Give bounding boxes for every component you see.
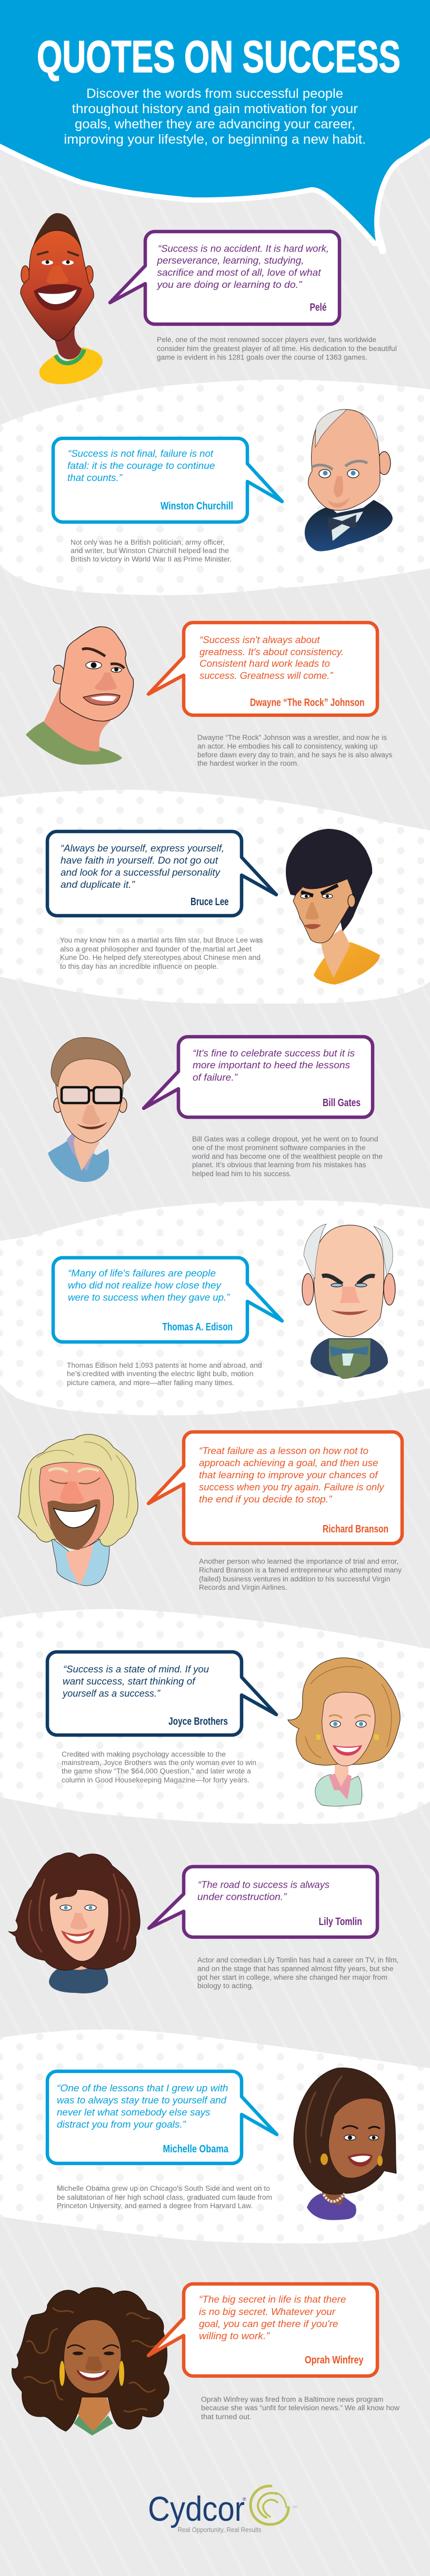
quote: Branson: “Treat failure as a lesson on how not to [199,1445,368,1456]
biography: Lily Tomlin: got her start in college, where she changed her major from [197,1973,387,1981]
quote: The Rock: Consistent hard work leads to [199,658,330,669]
quote: Oprah Winfrey: goal, you can get there if you're [199,2318,338,2329]
biography: Edison [67,1361,262,1387]
biography: Churchill: and writer, but Winston Churchill helped lead the [71,547,229,555]
biography: Bill Gates: planet. It’s obvious that learning from his mistakes has [192,1161,366,1169]
speech bubble: Pelé [110,232,339,324]
biography: Edison: Thomas Edison held 1,093 patents at home and abroad, and [67,1361,262,1369]
biography: Branson: Records and Virgin Airlines. [199,1583,287,1591]
quote: Edison: “Many of life's failures are people [68,1267,216,1279]
speech bubble: Bill Gates [144,1037,373,1117]
biography: Churchill: British to victory in World War II as Prime Minister. [71,555,232,563]
biography: Oprah Winfrey: that turned out. [201,2413,252,2421]
quote: Branson: approach achieving a goal, and then use [199,1457,378,1468]
biography: The Rock: the hardest worker in the room. [197,759,299,767]
speech bubble: Oprah Winfrey [148,2284,377,2376]
biography: Lily Tomlin: biology to acting. [197,1982,254,1990]
biography: Oprah Winfrey: Oprah Winfrey was fired from a Baltimore news program [201,2395,383,2403]
biography: Churchill: Not only was he a British politician, army officer, [71,538,225,546]
band: white dotted section 3 [0,1200,430,1415]
biography: Branson [199,1558,402,1591]
band: white dotted section 4 [0,1609,430,1824]
biography: Bruce Lee: to this day has an incredible influence on people. [60,963,218,970]
biography: Joyce Brothers [62,1750,256,1784]
biography: Pelé [157,336,397,361]
quote: Joyce Brothers: yourself as a success.” [62,1688,161,1699]
speech bubble: Bruce Lee [47,831,276,916]
attribution: Joyce Brothers: Joyce Brothers [168,1716,228,1727]
logo: Cydcor: Cydcor [148,2489,245,2528]
panel: Dwayne Johnson [26,623,393,767]
biography: Lily Tomlin [197,1956,399,1990]
biography: Bill Gates: one of the most prominent software companies in the [192,1144,365,1151]
quote: Pelé: perseverance, learning, studying, [156,255,304,266]
attribution: Oprah Winfrey: Oprah Winfrey [305,2354,364,2366]
biography: The Rock [197,734,393,767]
quote: The Rock: success. Greatness will come.” [199,670,333,681]
quote: Michelle Obama: never let what somebody else says [57,2107,211,2118]
quote: Branson: that learning to improve your chances of [199,1469,378,1480]
quote: Bruce Lee: and look for a successful personality [61,867,221,878]
speech bubble: Churchill [53,438,282,522]
biography: Bruce Lee: Kune Do. He helped defy stereotypes about Chinese men and [60,954,261,961]
speech bubble: Branson [148,1432,402,1543]
biography: Joyce Brothers: Credited with making psychology accessible to the [62,1750,226,1758]
attribution: Churchill: Winston Churchill [161,500,233,512]
biography: Branson: Another person who learned the importance of trial and error, [199,1558,399,1565]
quote: The Rock [199,634,344,681]
quote: Lily Tomlin: “The road to success is always [198,1879,329,1890]
biography: Bill Gates [192,1135,383,1178]
biography: Branson: Richard Branson is a famed entrepreneur who attempted many [199,1566,402,1574]
biography: Michelle Obama: be salutatorian of her high school class, graduated cum laude from [57,2193,272,2201]
biography: The Rock: Dwayne “The Rock” Johnson was a wrestler, and now he is [197,734,387,741]
attribution: Branson: Richard Branson [323,1523,388,1535]
biography: The Rock: before dawn every day to train, and he says he is also always [197,751,393,759]
band: white dotted section 2 [0,790,430,1004]
quote: Lily Tomlin: under construction.” [197,1891,287,1902]
quote: Michelle Obama: “One of the lessons that I grew up with [57,2082,228,2093]
quote: Bruce Lee [61,843,224,890]
attribution: Lily Tomlin: Lily Tomlin [319,1916,362,1928]
biography: Branson: (failed) business ventures in addition to his successful Virgin [199,1575,391,1583]
biography: Pelé: Pelé, one of the most renowned soccer players ever, fans worldwide [157,336,376,344]
quote: The Rock: greatness. It's about consistency. [199,646,344,657]
intro text: goals, whether they are advancing your career, [75,117,355,132]
biography: Churchill [71,538,232,563]
quote: Churchill: that counts.” [67,472,123,483]
quote: Branson: success when you try again. Failure is only [199,1481,385,1492]
logo: Cydcor: Real Opportunity, Real Results [178,2526,261,2533]
speech bubble: Michelle Obama [47,2071,277,2163]
quote: Bruce Lee: and duplicate it.” [61,879,135,890]
speech bubble: The Rock [148,623,377,715]
quote: Pelé: “Success is no accident. It is hard work, [158,243,329,254]
portrait: Michelle Obama [294,2068,396,2220]
quote: Michelle Obama: was to always stay true to yourself and [57,2094,227,2106]
biography: Bill Gates: world and has become one of the wealthiest people on the [192,1152,383,1160]
quote: Edison [68,1267,230,1303]
quote: Joyce Brothers: “Success is a state of mind. If you [63,1663,209,1675]
quote: Edison: who did not realize how close they [68,1280,222,1290]
speech bubble: Edison [53,1258,282,1342]
band: white dotted section 1 [0,379,430,595]
band: white dotted section 5 [0,2029,430,2243]
quote: Bruce Lee: “Always be yourself, express yourself, [61,843,224,854]
quote: Bill Gates: “It's fine to celebrate success but it is [193,1047,355,1059]
quote: Pelé: sacrifice and most of all, love of what [157,267,321,278]
biography: Michelle Obama: Michelle Obama grew up on Chicago’s South Side and went on to [57,2184,270,2192]
portrait: Bill Gates [48,1037,131,1182]
panel: Richard Branson [18,1432,402,1591]
attribution: Edison: Thomas A. Edison [162,1321,233,1333]
biography: Edison: picture camera, and more—after failing many times. [67,1379,234,1387]
biography: Joyce Brothers: the game show “The $64,000 Question,” and later wrote a [62,1767,252,1775]
quote: Pelé: you are doing or learning to do.” [156,279,302,290]
biography: Bruce Lee: also a great philosopher and founder of the martial art Jeet [60,945,252,953]
quote: Bruce Lee: have faith in yourself. Do not go out [61,855,218,866]
attribution: Bruce Lee: Bruce Lee [191,896,228,908]
biography: Bill Gates: Bill Gates was a college dropout, yet he went on to found [192,1135,378,1143]
quote: Lily Tomlin [197,1879,329,1902]
quote: Bill Gates [193,1047,355,1083]
attribution: Pelé: Pelé [309,301,326,314]
biography: Oprah Winfrey [201,2395,399,2421]
biography: Lily Tomlin: Actor and comedian Lily Tomlin has had a career on TV, in film, [197,1956,399,1964]
icon: Cydcor swirl [251,2486,288,2524]
panel: Winston Churchill [53,409,393,563]
attribution: Michelle Obama: Michelle Obama [163,2143,228,2155]
quote: Joyce Brothers [62,1663,209,1699]
biography: Joyce Brothers: mainstream, Joyce Brothers was the only woman ever to win [62,1759,256,1767]
biography: Bruce Lee [60,936,263,970]
attribution: The Rock: Dwayne “The Rock” Johnson [250,697,364,708]
logo: Cydcor [148,2486,297,2533]
quote: The Rock: “Success isn't always about [199,634,320,645]
quote: Churchill [67,448,215,483]
quote: Branson [199,1445,385,1505]
intro text [64,86,366,147]
panel: Oprah Winfrey [12,2284,399,2435]
biography: Oprah Winfrey: because she was “unfit for television news.” We all know how [201,2404,399,2412]
portrait: The Rock [26,627,134,765]
panel: Thomas Edison [53,1224,395,1387]
biography: Lily Tomlin: and on the stage that has spanned almost fifty years, but she [197,1965,394,1972]
quote: Joyce Brothers: want success, start thinking of [63,1676,196,1687]
portrait: Oprah Winfrey [12,2288,169,2435]
portrait: Pelé [21,213,103,384]
portrait: Richard Branson [18,1435,138,1586]
biography: Joyce Brothers: column in Good Housekeeping Magazine—for forty years. [62,1776,249,1784]
quote: Oprah Winfrey: is no big secret. Whatever your [199,2306,336,2317]
panel: Lily Tomlin [8,1853,399,1993]
panel: Pelé [21,213,397,384]
portrait: Edison [302,1224,395,1379]
portrait: Lily Tomlin [8,1853,140,1993]
logo: Cydcor: SM [293,2506,297,2509]
panel: Joyce Brothers [47,1652,400,1806]
biography: Edison: he’s credited with inventing the electric light bulb, motion [67,1370,254,1378]
biography: Michelle Obama: Princeton University, and earned a degree from Harvard Law. [57,2202,253,2210]
quote: Michelle Obama: distract you from your goals.” [57,2119,186,2130]
portrait: Bruce Lee [286,829,380,985]
biography: Bruce Lee: You may know him as a martial arts film star, but Bruce Lee was [60,936,263,944]
quote: Michelle Obama [57,2082,228,2130]
biography: Bill Gates: helped lead him to his success. [192,1170,292,1178]
biography: The Rock: an actor. He embodies his call to consistency, waking up [197,742,378,750]
intro text: Discover the words from successful people [86,86,343,101]
intro text: improving your lifestyle, or beginning a new habit. [64,132,366,147]
biography: Michelle Obama [57,2184,272,2210]
logo: Cydcor: ® [243,2497,246,2502]
header banner: speech bubble [0,0,430,250]
quote: Pelé [156,243,329,290]
quote: Edison: were to success when they gave up.” [68,1291,230,1303]
quote: Oprah Winfrey: “The big secret in life is that there [199,2293,346,2305]
quote: Churchill: fatal: it is the courage to continue [67,460,215,471]
quote: Bill Gates: of failure.” [193,1071,238,1083]
portrait: Joyce Brothers [288,1658,400,1806]
panel: Bill Gates [48,1037,383,1182]
quote: Bill Gates: more important to heed the lessons [193,1059,350,1070]
biography: Pelé: game is evident in his 1281 goals over the course of 1363 games. [157,354,367,361]
quote: Oprah Winfrey: willing to work.” [199,2330,270,2341]
panel: Bruce Lee [47,829,380,985]
speech bubble: Joyce Brothers [47,1652,276,1735]
speech bubble: Lily Tomlin [149,1867,377,1937]
quote: Churchill: “Success is not final, failure is not [68,448,214,459]
biography: Pelé: consider him the greatest player of all time. His dedication to the beautiful [157,345,397,353]
intro text: throughout history and gain motivation for your [72,102,358,116]
attribution: Bill Gates: Bill Gates [323,1097,361,1109]
portrait: Churchill [305,409,393,551]
quote: Oprah Winfrey [199,2293,346,2341]
quote: Branson: the end if you decide to stop.” [199,1494,332,1505]
panel: Michelle Obama [47,2068,396,2220]
